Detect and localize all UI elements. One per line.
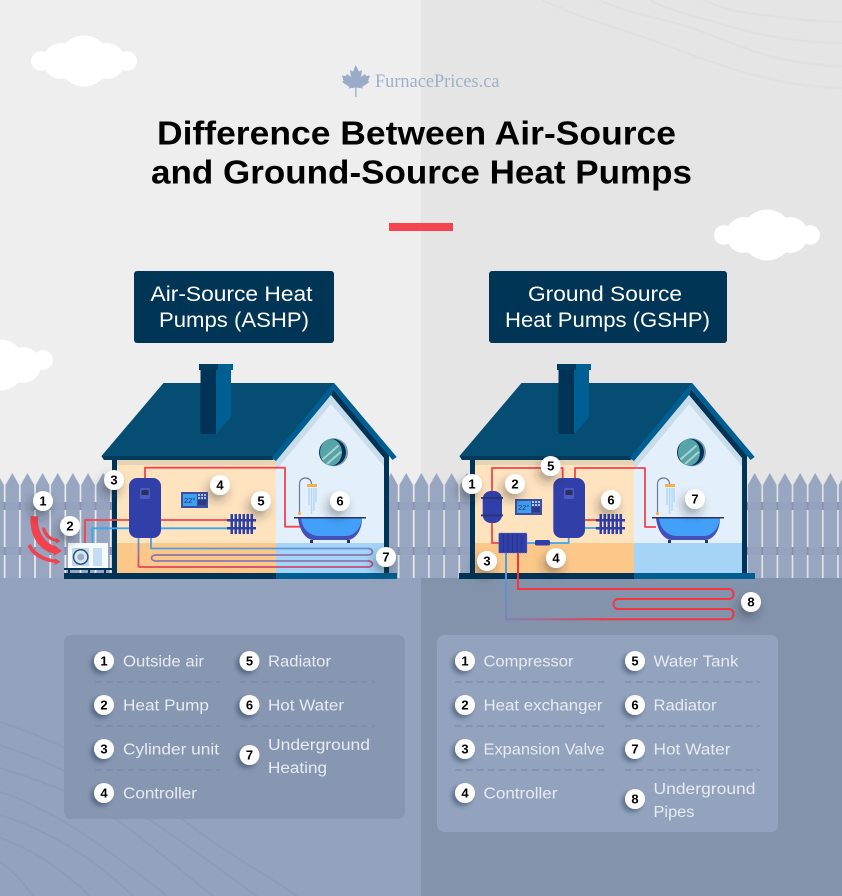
icon: maple leaf [342,65,370,97]
legend numbers: 7 [246,748,253,762]
heading: Ground Source Heat Pumps (GSHP) [489,271,727,343]
cylinder unit [129,478,161,538]
title: Difference Between Air-Source [157,114,676,152]
picket fence [0,473,842,578]
badge numbers: air-source house: 5 [257,494,265,508]
legend numbers: 1 [100,654,108,668]
legend labels: Underground [268,737,370,754]
badge numbers: ground-source house: 7 [691,492,699,506]
legend numbers: 4 [100,786,108,800]
legend numbers: 5 [631,654,639,668]
title: and Ground-Source Heat Pumps [151,154,692,190]
red divider bar [389,223,453,231]
radiator [227,514,256,534]
controller [181,492,208,508]
legend numbers: 8 [631,792,639,806]
badge numbers: air-source house: 1 [39,494,47,508]
controller: 22° [518,503,529,512]
panel: ground-source legend [437,635,778,832]
heat pump unit [64,543,112,573]
legend numbers: 2 [100,698,108,712]
badge numbers: air-source house: 2 [66,518,74,534]
compressor [481,491,503,523]
controller [515,499,542,515]
panel: air-source legend [64,635,405,819]
legend labels: Outside air [123,654,204,670]
badge numbers: ground-source house: 2 [511,476,519,492]
icon: bath and shower [294,478,366,543]
interior walls and floors [459,395,755,579]
legend numbers: 3 [461,742,469,756]
legend labels: Hot Water [268,698,344,714]
legend numbers: 7 [631,742,639,756]
badge numbers: air-source house: 3 [110,472,118,488]
cloud: left edge [0,340,53,390]
number badges: ground-source house [462,456,761,612]
legend labels: Compressor [484,654,574,670]
title [151,114,692,190]
heading: Ground Source Heat Pumps (GSHP): Ground Source [528,283,682,306]
legend badges [94,651,260,803]
pipes [492,468,656,543]
expansion valve block [499,533,550,553]
badge numbers: ground-source house: 3 [483,554,491,568]
legend labels: Water Tank [654,654,739,670]
chimney [557,364,591,434]
heading: Air-Source Heat Pumps (ASHP): Pumps (ASHP) [159,309,309,332]
badge numbers: air-source house: 6 [336,494,344,508]
logo text: FurnacePrices.ca [375,72,500,92]
logo: FurnacePrices.ca [342,65,500,97]
cloud: top right [714,210,820,260]
badge numbers: air-source house: 7 [382,550,390,564]
legend labels: Radiator [268,654,331,670]
round window [677,438,706,466]
badge numbers: ground-source house: 8 [747,594,755,610]
cloud: top left [31,36,137,86]
badge numbers: ground-source house: 5 [547,458,554,474]
legend numbers: 1 [461,654,469,668]
legend labels [123,654,370,802]
badge numbers: ground-source house: 1 [468,476,476,492]
water tank [553,478,585,538]
heading: Ground Source Heat Pumps (GSHP): Heat Pumps (GSHP) [505,309,710,332]
legend labels [484,654,756,821]
legend labels: Heating [268,760,327,777]
legend numbers: 4 [461,786,469,800]
legend numbers [100,654,253,800]
round window [319,438,348,466]
number badges: air-source house [33,470,396,567]
interior walls and floors [64,395,397,579]
house: ground-source [459,364,761,620]
legend labels: Controller [484,786,558,802]
heading: Air-Source Heat Pumps (ASHP) [134,271,334,343]
legend numbers [461,654,639,806]
icon: bath and shower [652,478,724,543]
legend labels: Cylinder unit [123,742,220,758]
legend labels: Radiator [654,698,716,714]
badge numbers: ground-source house [468,458,755,610]
legend numbers: 6 [631,698,639,712]
legend numbers: 5 [246,654,253,668]
badge numbers: ground-source house: 4 [552,550,560,566]
legend labels: Heat Pump [123,698,209,714]
legend numbers: 2 [461,698,469,712]
legend badges [455,651,645,809]
legend numbers: 6 [246,698,253,712]
heading: Air-Source Heat Pumps (ASHP): Air-Source Heat [150,283,313,306]
legend labels: Expansion Valve [484,742,604,758]
legend labels: Underground [654,781,756,798]
badge numbers: ground-source house: 6 [607,492,615,508]
roof [102,383,397,461]
radiator [596,514,625,534]
controller: 22° [184,496,195,505]
roof [460,383,755,461]
legend labels: Heat exchanger [484,698,602,714]
legend labels: Controller [123,786,197,802]
arrows: outside air [28,516,62,565]
pipes [85,468,372,567]
legend labels: Pipes [654,804,695,821]
badge numbers: air-source house [39,472,390,564]
legend numbers: 3 [100,742,108,756]
badge numbers: air-source house: 4 [216,478,224,492]
legend labels: Hot Water [654,742,730,758]
house: air-source [28,364,397,579]
chimney [199,364,233,434]
underground pipes [506,553,734,620]
